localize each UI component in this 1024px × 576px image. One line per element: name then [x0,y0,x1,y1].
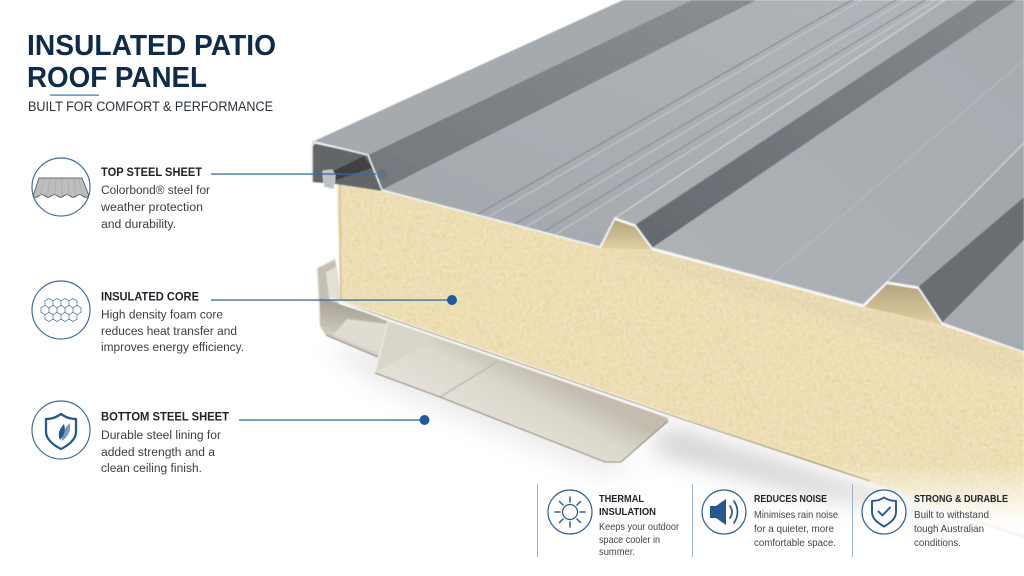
description: Durable steel lining for [101,430,221,442]
top steel sheet [312,0,1024,352]
leader: bottom steel sheet [239,415,430,425]
heading: TOP STEEL SHEET [101,165,203,179]
rib 2 top face [615,0,977,225]
description: for a quieter, more [754,523,834,535]
first bay [320,298,388,357]
leader: insulated core [211,295,457,305]
subtitle: BUILT FOR COMFORT & PERFORMANCE [28,99,273,114]
item: insulated core [32,281,244,354]
ridge 1 side face [368,0,757,190]
icon: shield check [862,490,906,534]
description: Keeps your outdoor [599,521,679,533]
description: reduces heat transfer and [101,326,237,338]
heading: REDUCES NOISE [754,493,827,505]
foam bottom edge [330,298,1024,537]
description: added strength and a [101,447,216,459]
heading: STRONG & DURABLE [914,493,1008,505]
description: clean ceiling finish. [101,463,202,475]
heading: INSULATION [599,506,656,518]
title: INSULATED PATIO [27,30,276,62]
icon: corrugated sheet [32,158,90,216]
highlights [615,0,1024,282]
item: bottom steel sheet [32,401,230,475]
ridge 1 top face [312,0,692,155]
benefit: strong and durable [852,484,1008,557]
description: Built to withstand [914,509,989,521]
description: Minimises rain noise [754,509,838,521]
item: top steel sheet [32,158,210,231]
description: Colorbond® steel for [101,185,210,197]
heading: BOTTOM STEEL SHEET [101,410,230,424]
leader: top steel sheet [211,169,387,179]
description [101,310,244,354]
rib 3 side face [918,197,1024,323]
pan stripes [478,0,935,234]
description [100,185,210,231]
heading: THERMAL [599,493,645,505]
foam fade [829,468,1024,536]
rib and pan [375,320,668,462]
roof panel illustration [312,0,1024,560]
description [914,509,989,549]
front sheet edge [312,142,1024,352]
description: summer. [599,546,635,558]
ribbed pan [382,0,945,247]
icon: shield with leaf [32,401,90,459]
benefit: reduces noise [692,484,838,557]
heading [599,493,656,518]
description [599,521,679,558]
bottom steel sheet [317,258,668,462]
icon: honeycomb [32,281,90,339]
ground shadow [325,345,960,518]
left return lip [317,258,341,335]
description: weather protection [100,202,203,214]
edge clip [323,170,335,189]
description: tough Australian [914,523,984,535]
box interior [312,143,382,191]
description [101,430,221,475]
description: conditions. [914,537,961,549]
description [754,509,838,549]
benefit: thermal insulation [537,484,679,558]
description: space cooler in [599,534,660,546]
description: comfortable space. [754,537,836,549]
wide pan [652,0,1024,305]
title: ROOF PANEL [27,62,207,94]
title underline [50,94,99,96]
rib 3 top face [887,143,1024,287]
title [27,30,276,94]
icon: sun [548,490,592,534]
description: High density foam core [101,310,223,322]
description: and durability. [101,219,176,231]
far pan [942,240,1024,352]
icon: speaker [702,490,746,534]
description: improves energy efficiency. [101,342,244,354]
insulated foam core [330,180,1024,540]
rib 2 side face [635,0,1017,248]
heading: INSULATED CORE [101,290,199,304]
